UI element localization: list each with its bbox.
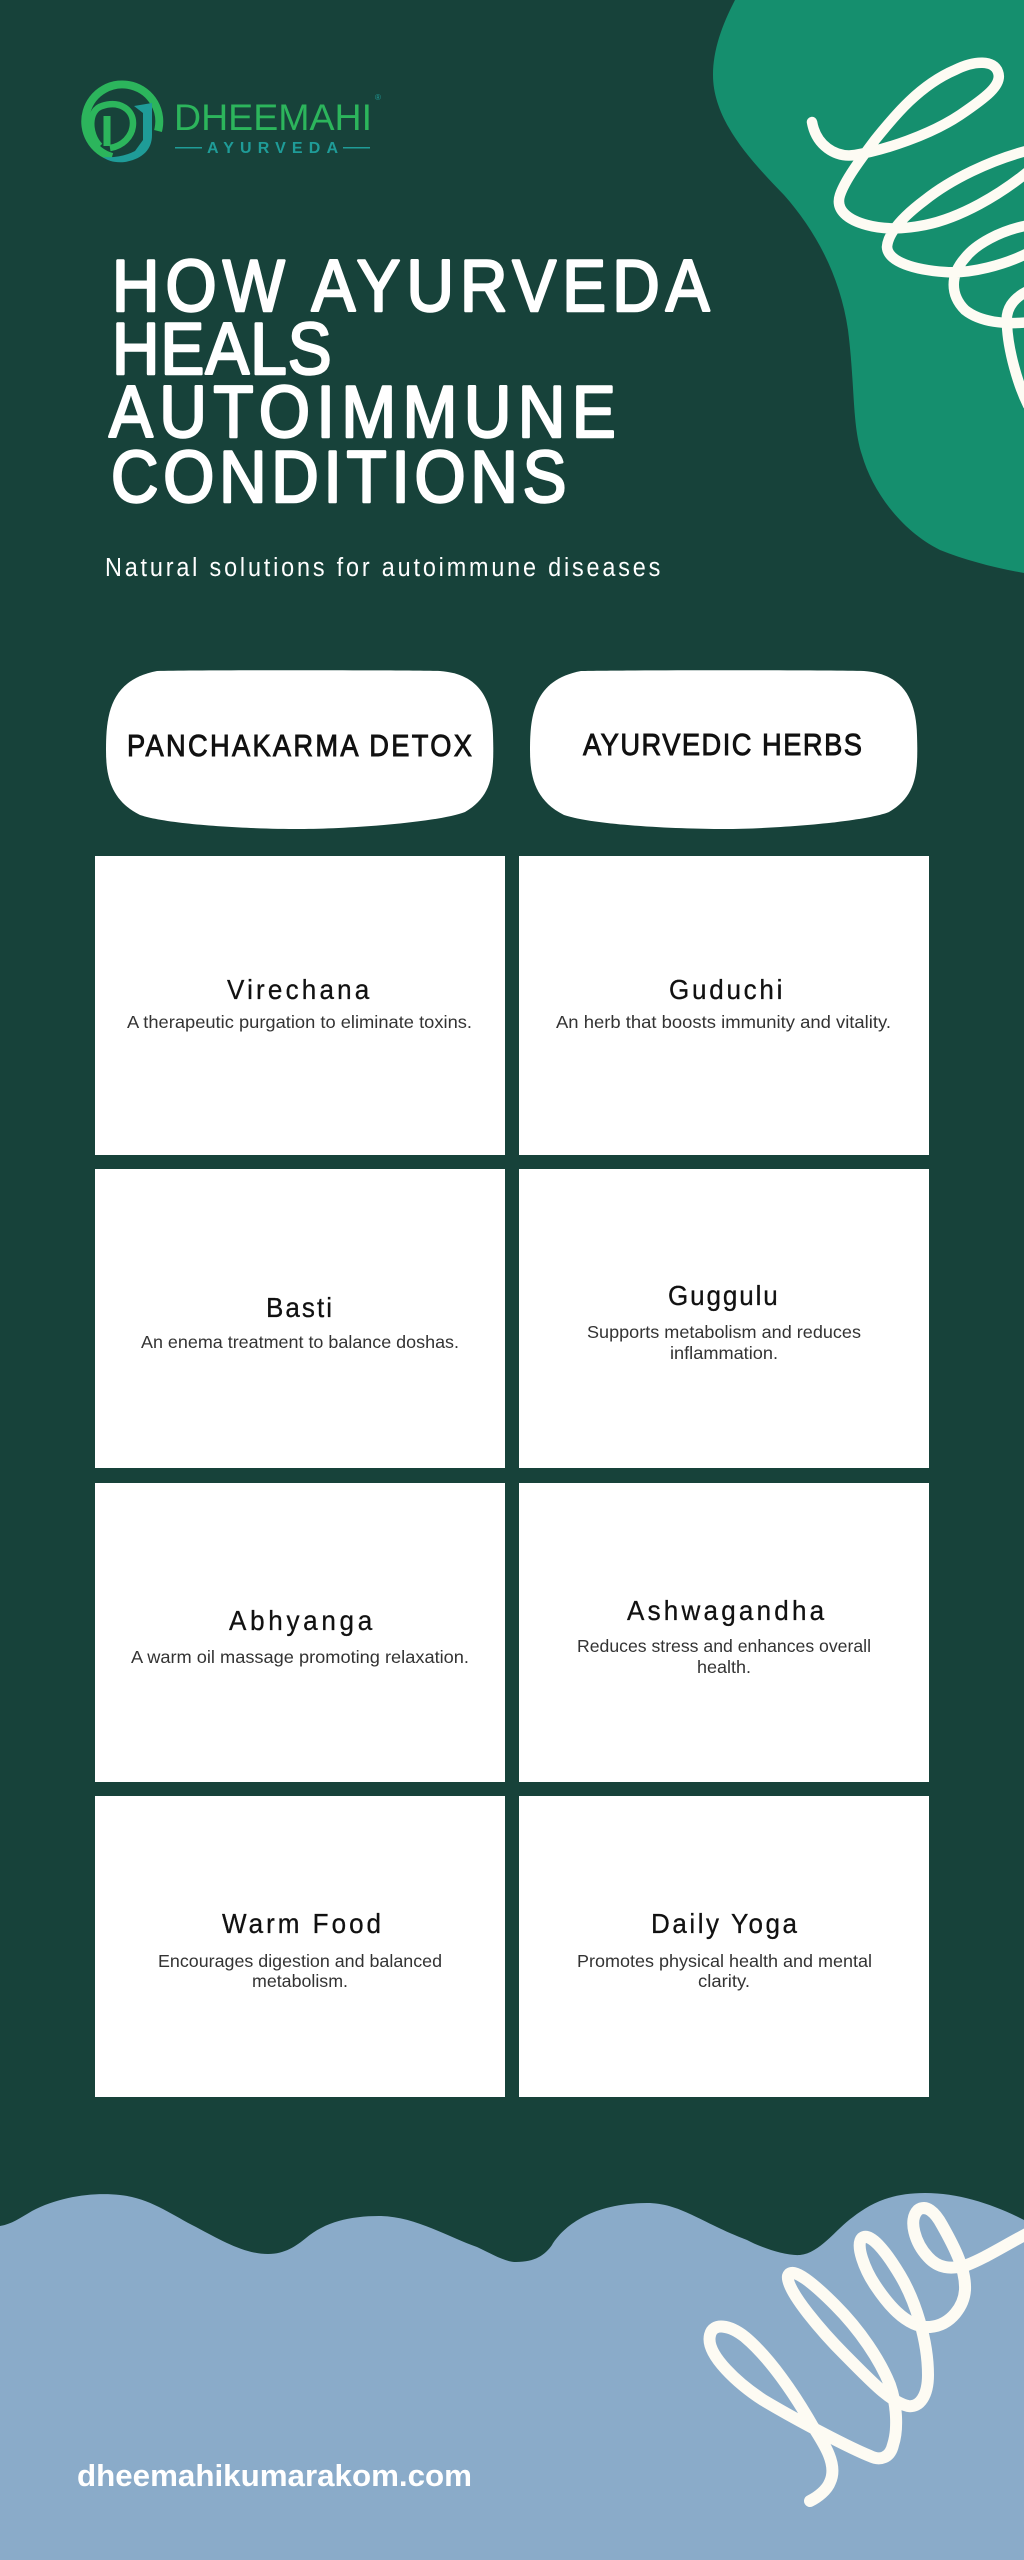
card: Daily Yoga: Promotes physical health and mental xyxy=(577,1951,872,1971)
card: Daily Yoga: Daily Yoga xyxy=(651,1908,798,1939)
card: Guduchi xyxy=(519,856,929,1155)
title: HOW AYURVEDA xyxy=(112,245,710,327)
card: Ashwagandha: Ashwagandha xyxy=(627,1595,825,1626)
logo icon xyxy=(85,84,159,162)
card: Daily Yoga xyxy=(519,1796,929,2097)
card: Basti: Basti xyxy=(266,1292,332,1323)
card: Daily Yoga: clarity. xyxy=(698,1971,750,1991)
bottom squiggle xyxy=(710,2208,1024,2501)
column header: Ayurvedic Herbs: AYURVEDIC HERBS xyxy=(583,728,862,762)
logo wordmark: DHEEMAHI xyxy=(174,97,372,138)
card: Warm Food xyxy=(95,1796,505,2097)
title: HEALS xyxy=(112,308,332,390)
card: Ashwagandha xyxy=(519,1483,929,1782)
column header: Panchakarma Detox xyxy=(106,670,493,829)
website URL: dheemahikumarakom.com xyxy=(77,2458,472,2493)
card: Abhyanga xyxy=(95,1483,505,1782)
logo: Dheemahi Ayurveda xyxy=(85,84,381,162)
card: Warm Food: Warm Food xyxy=(222,1908,381,1939)
card: Guggulu xyxy=(519,1169,929,1468)
card: Virechana xyxy=(95,856,505,1155)
registered mark: ® xyxy=(375,93,381,102)
card: Virechana: Virechana xyxy=(227,974,370,1005)
subtitle: Natural solutions for autoimmune diseases xyxy=(105,554,660,582)
title: AUTOIMMUNE xyxy=(109,371,616,453)
card: Guggulu: Supports metabolism and reduces xyxy=(587,1322,861,1342)
card: Guggulu: Guggulu xyxy=(668,1280,778,1311)
logo subline: AYURVEDA xyxy=(207,140,338,157)
title xyxy=(109,245,710,518)
column header: Ayurvedic Herbs xyxy=(530,670,917,829)
card: Virechana: A therapeutic purgation to eliminate toxins. xyxy=(127,1012,472,1032)
column header: Panchakarma Detox: PANCHAKARMA DETOX xyxy=(127,729,472,763)
card: Guduchi: Guduchi xyxy=(669,974,782,1005)
green blob top right xyxy=(713,0,1024,573)
blue wave footer xyxy=(0,2193,1024,2560)
card: Warm Food: Encourages digestion and balanced xyxy=(158,1951,442,1971)
card: Guggulu: inflammation. xyxy=(670,1343,778,1363)
title: CONDITIONS xyxy=(111,436,566,518)
top squiggle xyxy=(812,63,1024,405)
logo rule left xyxy=(175,147,202,148)
card: Abhyanga: A warm oil massage promoting relaxation. xyxy=(131,1647,469,1667)
card: Ashwagandha: Reduces stress and enhances overall xyxy=(577,1636,871,1656)
logo rule right xyxy=(343,147,370,148)
card: Basti xyxy=(95,1169,505,1468)
card: Basti: An enema treatment to balance doshas. xyxy=(141,1332,459,1352)
card: Guduchi: An herb that boosts immunity and vitality. xyxy=(556,1012,891,1032)
card: Abhyanga: Abhyanga xyxy=(229,1605,373,1636)
card: Ashwagandha: health. xyxy=(697,1657,751,1677)
card: Warm Food: metabolism. xyxy=(252,1971,348,1991)
